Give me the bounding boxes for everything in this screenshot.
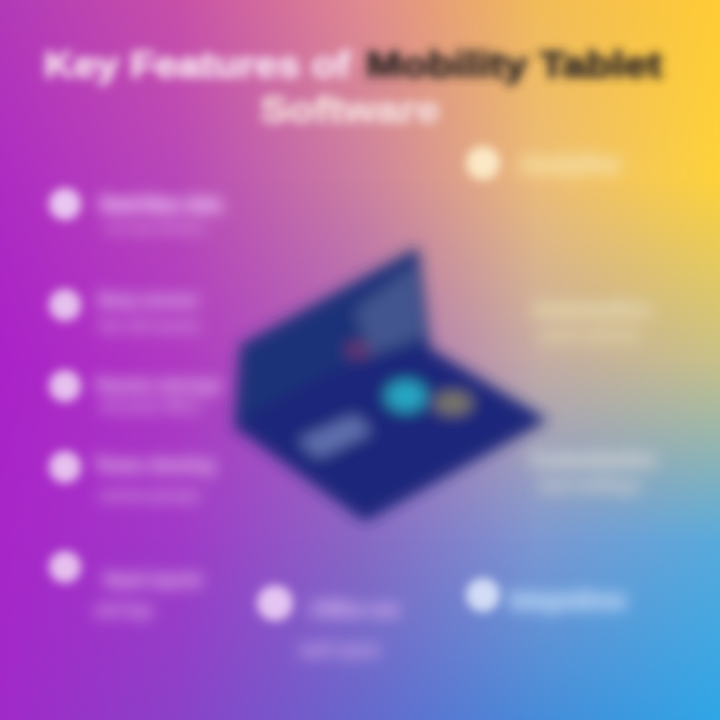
feature 4 text [95, 455, 215, 504]
feature 2 [49, 289, 200, 335]
feature 5 [49, 551, 202, 621]
feature 1 text [100, 194, 223, 235]
title: Mobility Tablet [366, 44, 662, 85]
screen highlight [355, 265, 425, 355]
feature 6 text: Offline use [310, 599, 400, 621]
feature 2 text [98, 290, 200, 335]
title [44, 44, 662, 130]
feature 4 [49, 451, 215, 504]
feature 4 text: across groups [100, 487, 200, 504]
feature 2 text: Easy access [98, 290, 198, 310]
feature 1 [49, 188, 223, 235]
feature 6 text [300, 599, 400, 661]
tablet screen [234, 247, 430, 430]
feature 3 text: Secure storage [96, 375, 221, 395]
feature 8 text: Analytics [520, 151, 620, 178]
feature 10 text: and settings [540, 475, 640, 495]
feature 9 text [532, 299, 650, 345]
cyan tile [386, 381, 426, 411]
bullet icon [49, 289, 81, 321]
feature 2 text: for all users [100, 318, 200, 335]
feature 4 text: Team sharing [95, 455, 215, 475]
tablet keyboard base [232, 345, 548, 522]
bullet icon [49, 551, 81, 583]
feature 1 text: on any device [105, 220, 205, 235]
feature 10 text: Customization [530, 449, 656, 471]
bullet icon [49, 188, 81, 220]
feature 10 text [530, 449, 656, 495]
bullet icon [49, 370, 81, 402]
amber tile [434, 392, 472, 414]
feature 5 text: Smart reports [104, 570, 202, 591]
feature 5 text: and logs [95, 600, 153, 621]
title: Key Features of [44, 44, 351, 85]
feature 3 text: of your files [100, 398, 200, 415]
light keypad [298, 415, 372, 458]
feature 1 text: Real-time data [100, 194, 223, 216]
bullet icon [466, 578, 500, 612]
feature 5 text [95, 570, 202, 621]
feature 6 [257, 585, 400, 661]
bullet icon [49, 451, 81, 483]
red accent [346, 343, 370, 357]
feature 7 [466, 578, 626, 614]
feature 9 text: Automation [532, 299, 650, 321]
tablet illustration [232, 247, 548, 522]
feature 3 text [96, 375, 221, 415]
title: Software [260, 89, 440, 130]
feature 3 [49, 370, 221, 415]
feature 6 text: and sync [300, 639, 380, 661]
feature 7 text: Integrations [510, 587, 626, 614]
bullet icon [257, 585, 293, 621]
feature 8 [466, 146, 620, 180]
bullet icon [466, 146, 500, 180]
feature 9 text: and alerts [540, 325, 640, 345]
